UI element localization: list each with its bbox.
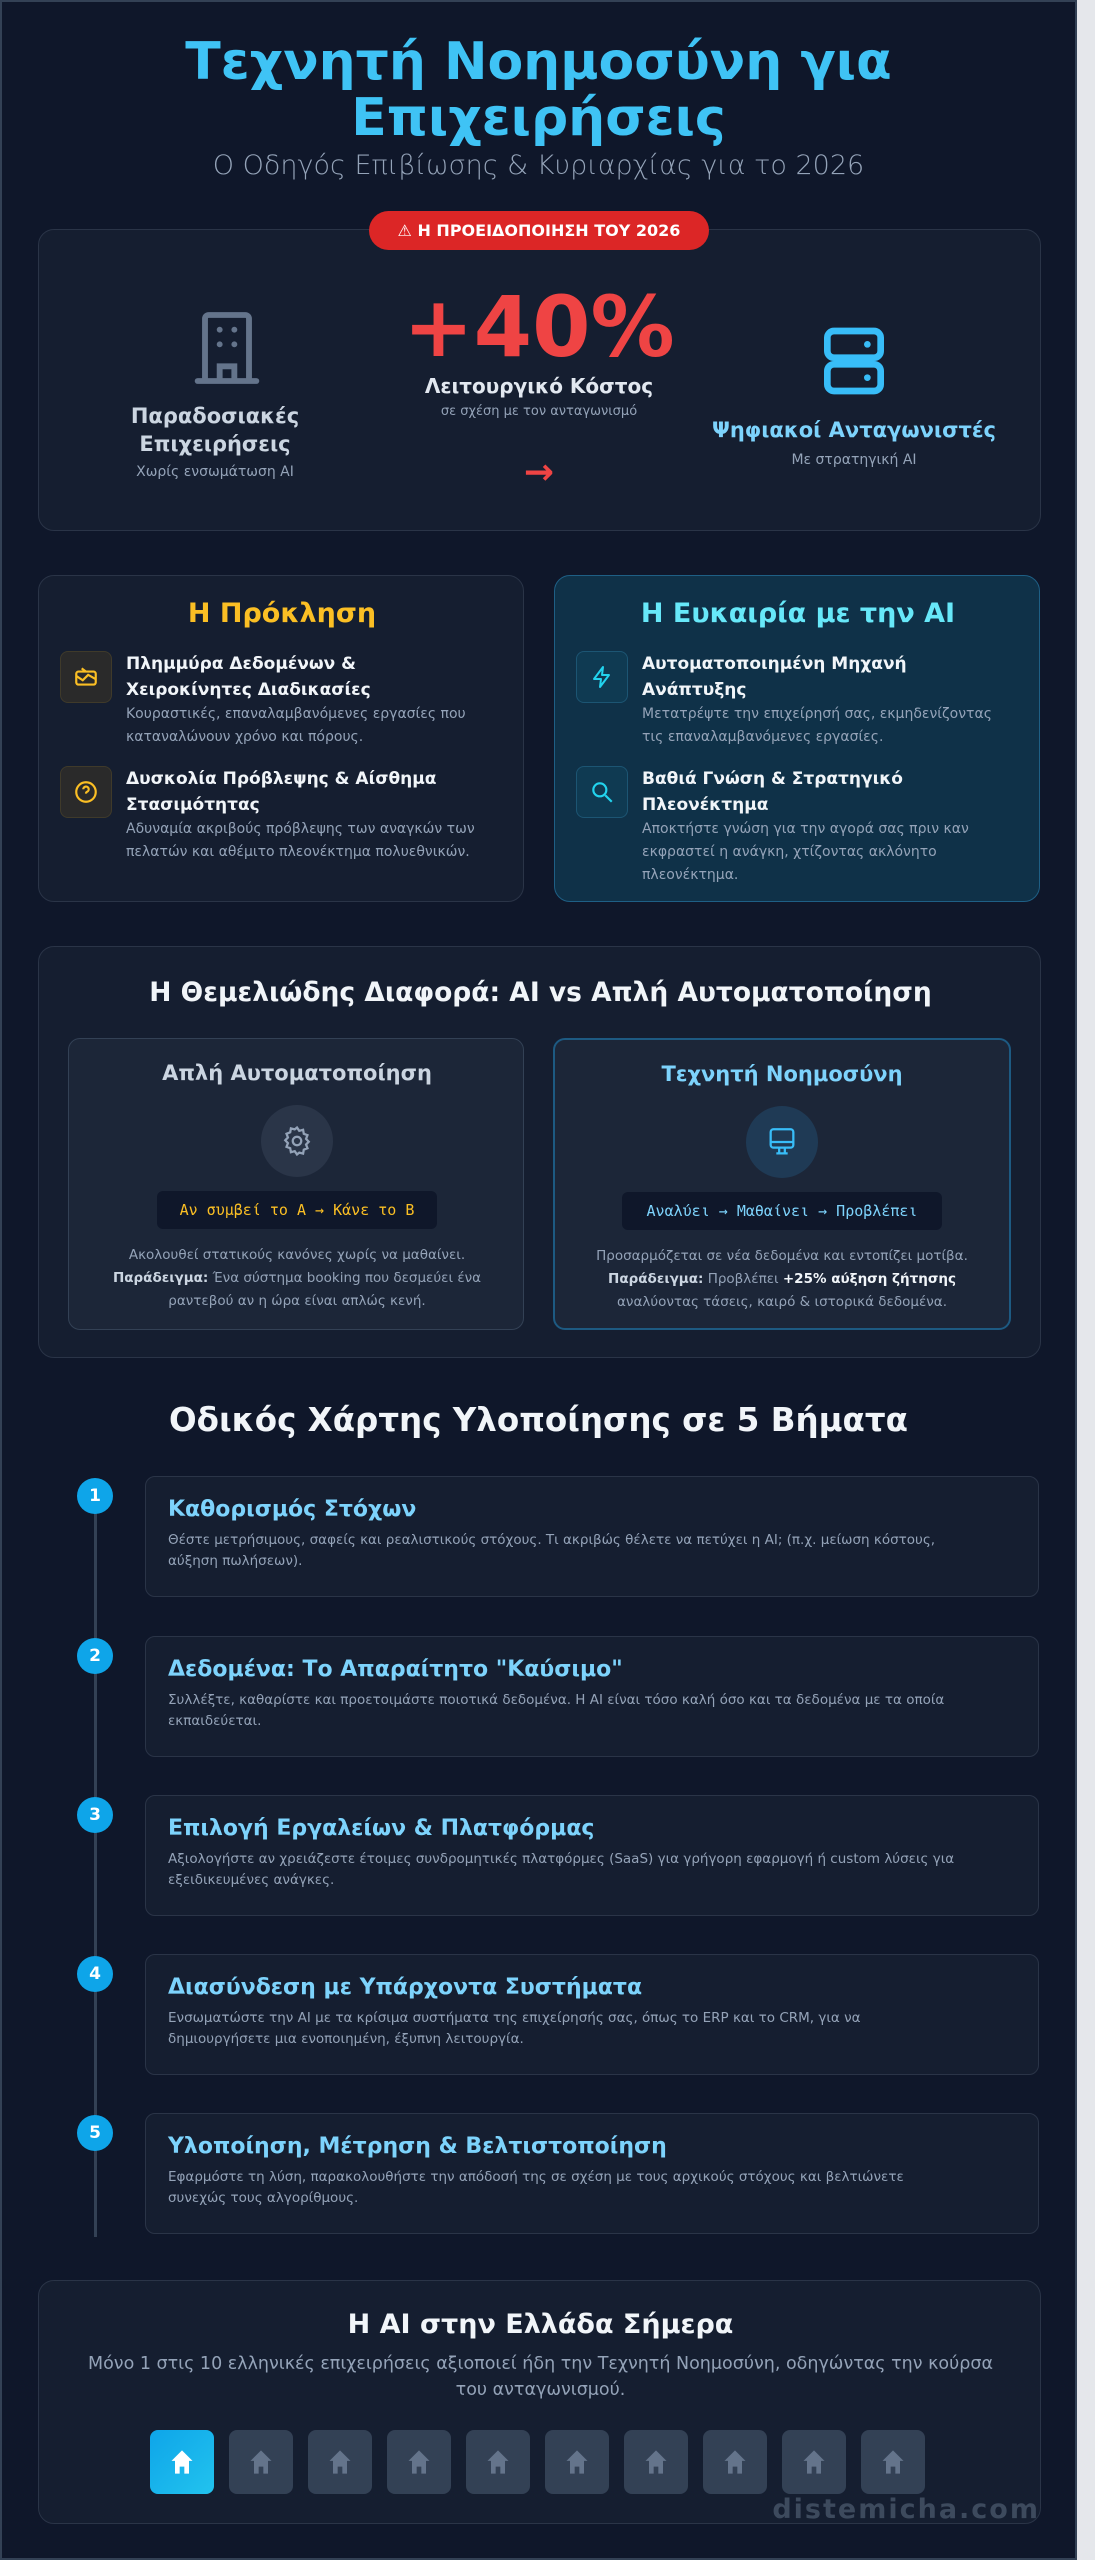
icon: server [824, 328, 884, 394]
step 5: 5 [89, 2123, 101, 2143]
watermark: distemicha.com [772, 2494, 1040, 2525]
text: digital competitors [712, 418, 996, 468]
item: data flood: Κουραστικές, επαναλαμβανόμενες εργασίες που καταναλώνουν χρόνο και πόρους. [126, 706, 466, 745]
badge: warning: ⚠ Η ΠΡΟΕΙΔΟΠΟΙΗΣΗ ΤΟΥ 2026 [398, 221, 680, 240]
step 2 [77, 1638, 113, 1674]
text: Υλοποίηση, Μέτρηση & Βελτιστοποίηση [168, 2134, 667, 2159]
title [185, 32, 892, 148]
step 5 [77, 2115, 113, 2151]
text: stat: του ανταγωνισμού. [456, 2380, 625, 2400]
step 4 [77, 1956, 113, 1992]
text: stat [88, 2354, 993, 2400]
card: AI: Τεχνητή Νοημοσύνη [661, 1062, 903, 1086]
step 2: 2 [89, 1646, 101, 1666]
text: digital competitors: Με στρατηγική AI [791, 452, 917, 468]
heading: roadmap: Οδικός Χάρτης Υλοποίησης σε 5 Βήματα [169, 1401, 908, 1439]
panel: AI in Greece [38, 2280, 1041, 2524]
text: δημιουργήσετε μια ενοποιημένη, έξυπνη λειτουργία. [168, 2031, 524, 2047]
item: forecasting: Δυσκολία Πρόβλεψης & Αίσθημα [126, 769, 436, 789]
card: AI: αναλύοντας τάσεις, καιρό & ιστορικά δεδομένα. [617, 1294, 947, 1310]
text: Επιλογή Εργαλείων & Πλατφόρμας [168, 1816, 594, 1841]
step 1 [77, 1478, 113, 1514]
text: συνεχώς τους αλγορίθμους. [168, 2190, 358, 2206]
text: Δεδομένα: Το Απαραίτητο "Καύσιμο" [168, 1657, 623, 1682]
card: simple automation: Παράδειγμα: Ένα σύστημα booking που δεσμεύει ένα ραντεβού αν η ώρα είναι απλώς κενή. [113, 1270, 481, 1309]
item: deep insight: Αποκτήστε γνώση για την αγορά σας πριν καν εκφραστεί η ανάγκη, χτίζοντας ακλόνητο πλεονέκτημα. [642, 821, 969, 883]
item: automation engine: Ανάπτυξης [642, 680, 746, 700]
text: traditional: Επιχειρήσεις [139, 432, 291, 456]
heading: opportunity: Η Ευκαιρία με την AI [641, 598, 955, 629]
icon: building [194, 312, 260, 384]
card: simple automation: Ακολουθεί στατικούς κανόνες χωρίς να μαθαίνει. [129, 1247, 465, 1263]
item: automation engine: Μετατρέψτε την επιχείρησή σας, εκμηδενίζοντας [642, 706, 992, 722]
icon: gear [261, 1105, 333, 1177]
title: Επιχειρήσεις [351, 88, 726, 148]
item: deep insight: Βαθιά Γνώση & Στρατηγικό [642, 769, 903, 789]
card: AI [553, 1038, 1011, 1330]
code: learn [622, 1192, 942, 1230]
card: simple automation: Απλή Αυτοματοποίηση [162, 1061, 432, 1085]
heading: challenge: Η Πρόκληση [188, 598, 376, 629]
code: learn: Αναλύει → Μαθαίνει → Προβλέπει [647, 1202, 917, 1220]
card: simple automation [68, 1038, 524, 1330]
text: traditional: Παραδοσιακές [131, 404, 299, 428]
text: Ενσωματώστε την AI με τα κρίσιμα συστήματα της επιχείρησής σας, όπως το ERP και το CRM, για να [168, 2010, 861, 2026]
code: rule [157, 1191, 437, 1229]
step 4: 4 [89, 1964, 101, 1984]
stat: +40% [403, 278, 675, 419]
item: automation engine: Αυτοματοποιημένη Μηχανή [642, 654, 907, 674]
item: automation engine [576, 651, 992, 745]
step 1: 1 [89, 1486, 101, 1506]
text: stat: Μόνο 1 στις 10 ελληνικές επιχειρήσεις αξιοποιεί ήδη την Τεχνητή Νοημοσύνη, οδηγώντας την κούρσα [88, 2354, 993, 2374]
heading: greece: Η AI στην Ελλάδα Σήμερα [348, 2309, 733, 2340]
badge: warning [369, 211, 709, 250]
text: Αξιολογήστε αν χρειάζεστε έτοιμες συνδρομητικές πλατφόρμες (SaaS) για γρήγορη εφαρμογή ή custom λύσεις για εξειδικευμένες ανάγκες. [168, 1851, 954, 1888]
step 3 [77, 1797, 113, 1833]
stat: +40%: Λειτουργικό Κόστος [425, 374, 653, 398]
icon chart: 1 in 10 [150, 2430, 925, 2494]
text: Εφαρμόστε τη λύση, παρακολουθήστε την απόδοσή της σε σχέση με τους αρχικούς στόχους και βελτιώνετε [168, 2169, 904, 2185]
panel: opportunity [554, 575, 1040, 902]
item: forecasting: Στασιμότητας [126, 795, 260, 815]
item: deep insight: Πλεονέκτημα [642, 795, 768, 815]
item: data flood: Χειροκίνητες Διαδικασίες [126, 680, 371, 700]
item: forecasting: Αδυναμία ακριβούς πρόβλεψης των αναγκών των πελατών και αθέμιτο πλεονέκτημα πολυεθνικών. [126, 821, 475, 860]
card: AI: Προσαρμόζεται σε νέα δεδομένα και εντοπίζει μοτίβα. [596, 1248, 968, 1264]
text: traditional: Χωρίς ενσωμάτωση AI [136, 464, 294, 480]
subtitle: Ο Οδηγός Επιβίωσης & Κυριαρχίας για το 2026 [213, 150, 864, 181]
item: forecasting [60, 766, 475, 860]
panel: difference [38, 946, 1041, 1358]
title: Τεχνητή Νοημοσύνη για [185, 32, 892, 92]
item: automation engine: τις επαναλαμβανόμενες εργασίες. [642, 729, 883, 745]
item: data flood: Πλημμύρα Δεδομένων & [126, 654, 356, 674]
text: Διασύνδεση με Υπάρχοντα Συστήματα [168, 1975, 642, 2000]
card: AI: Παράδειγμα: Προβλέπει +25% αύξηση ζήτησης [608, 1271, 956, 1287]
text: traditional [131, 404, 299, 480]
step 3: 3 [89, 1805, 101, 1825]
icon: monitor [746, 1106, 818, 1178]
panel: warning [38, 229, 1041, 531]
stat: +40%: σε σχέση με τον ανταγωνισμό [441, 404, 637, 419]
code: rule: Αν συμβεί το A → Κάνε το B [180, 1201, 414, 1219]
stat: +40%: +40% [403, 278, 675, 376]
panel: challenge [38, 575, 524, 902]
heading: difference: Η Θεμελιώδης Διαφορά: AI vs Απλή Αυτοματοποίηση [149, 977, 932, 1008]
text: αύξηση πωλήσεων). [168, 1553, 302, 1569]
text: Συλλέξτε, καθαρίστε και προετοιμάστε ποιοτικά δεδομένα. Η AI είναι τόσο καλή όσο και τα δεδομένα με τα οποία εκπαιδεύεται. [168, 1692, 944, 1729]
item: deep insight [576, 766, 969, 883]
item: data flood [60, 651, 466, 745]
arrow: → [524, 452, 554, 493]
timeline line [94, 1497, 97, 2237]
text: Καθορισμός Στόχων [168, 1497, 416, 1522]
text: Θέστε μετρήσιμους, σαφείς και ρεαλιστικούς στόχους. Τι ακριβώς θέλετε να πετύχει η AI; (π.χ. μείωση κόστους, [168, 1532, 935, 1548]
text: digital competitors: Ψηφιακοί Ανταγωνιστές [712, 418, 996, 442]
